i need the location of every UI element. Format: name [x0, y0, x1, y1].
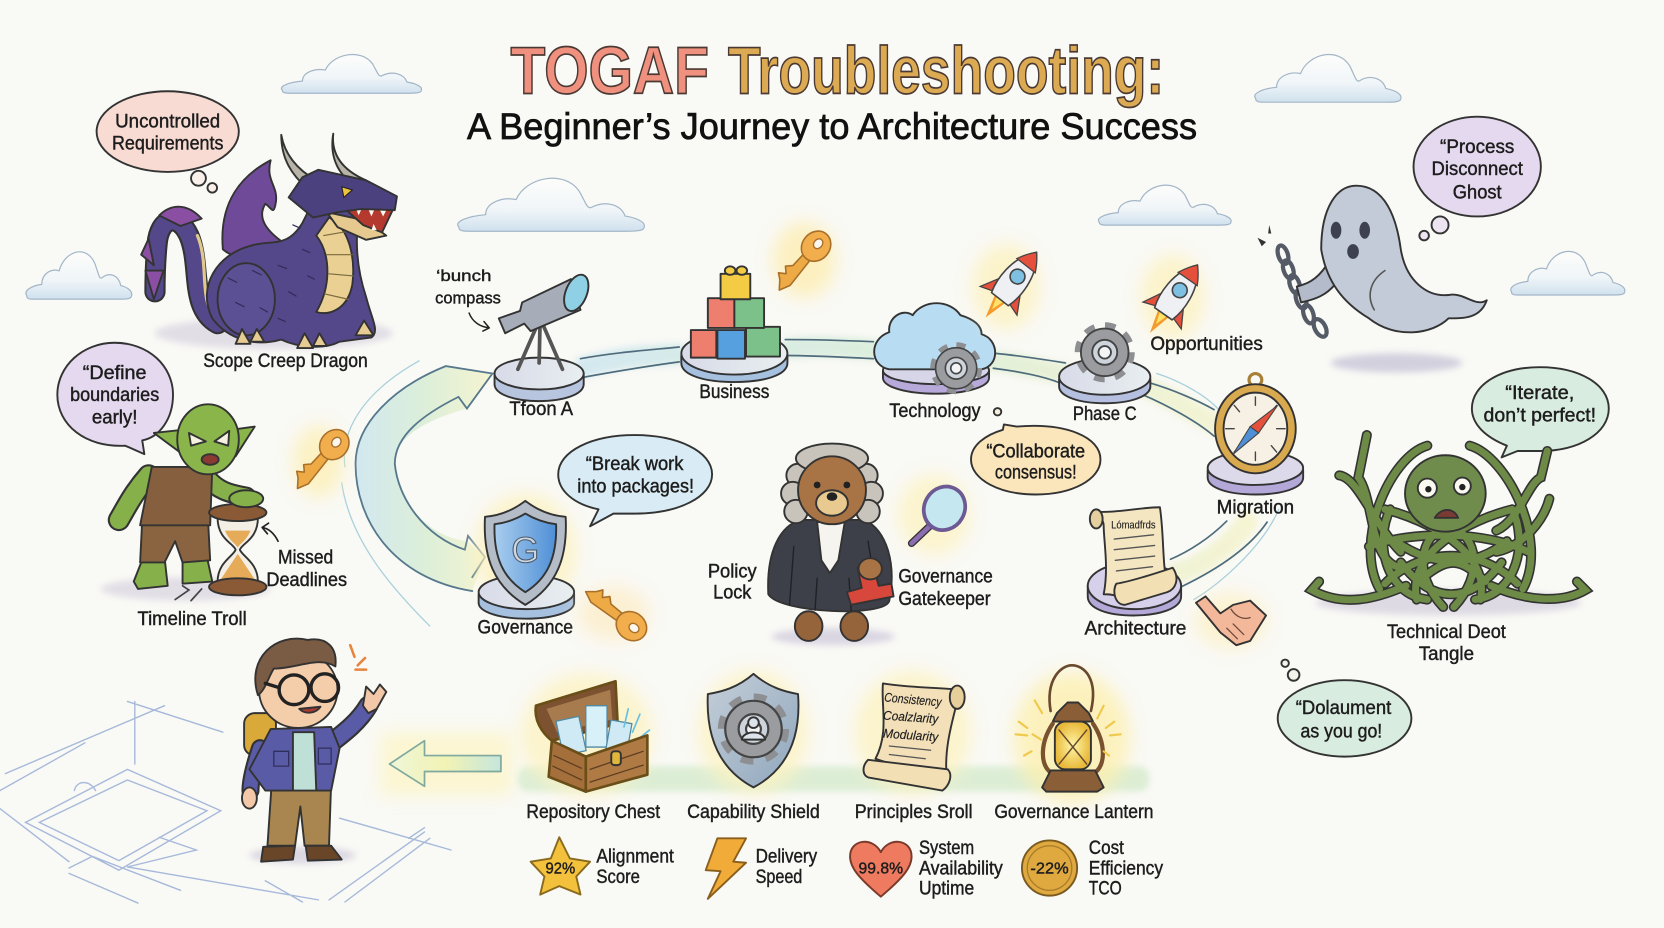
bear head: [798, 456, 866, 524]
compass needle: [1250, 405, 1278, 433]
metric: Delivery Speed: [706, 838, 818, 899]
architect trousers: [267, 783, 331, 846]
speech bubble: Break work: “Break work: [586, 454, 684, 475]
troll left arm: [119, 475, 149, 520]
tangle head: [1405, 455, 1486, 532]
architect smile: [299, 707, 321, 713]
label: Business: Business: [699, 382, 769, 403]
principles glow: [854, 671, 971, 794]
lantern cap: [1053, 702, 1093, 722]
principles text: Consistency: [884, 689, 943, 709]
principles text: Modularity: [883, 726, 939, 744]
icon: coin: [1022, 840, 1077, 896]
speech bubble: Collaborate: [971, 408, 1100, 495]
ghost chain: [1276, 244, 1329, 339]
ghost arm: [1297, 265, 1335, 302]
troll ears: [154, 427, 255, 456]
label: Architecture: Architecture: [1085, 619, 1186, 640]
tangle eyes: [1418, 479, 1437, 498]
label: Governance: Governance: [478, 618, 573, 639]
compass ticks: [1226, 397, 1285, 461]
text: Delivery Speed: [756, 847, 818, 888]
stage: Technology cloud and gear: [874, 303, 995, 394]
thought bubble: Uncontrolled Requirements: [97, 91, 239, 193]
artifact: Capability Shield: [698, 671, 809, 794]
label: Governance Gatekeeper: Governance: [898, 567, 993, 588]
architect lowered arm: [250, 748, 260, 791]
label: Repository Chest: Repository Chest: [526, 802, 661, 823]
thought bubble: Process Disconnect Ghost: Disconnect: [1432, 159, 1523, 180]
chest right face: [586, 735, 647, 792]
technology platform: [883, 371, 989, 394]
metric: Cost Efficiency TCO: [1022, 838, 1163, 900]
scroll lines: [1114, 535, 1155, 571]
phase c gear: [1081, 329, 1129, 376]
chest lid inner: [547, 690, 612, 732]
bear paw: [859, 558, 882, 579]
bear eyes: [814, 482, 821, 488]
phase c platform: [1059, 379, 1150, 403]
label: Governance Lantern: Governance Lantern: [994, 802, 1154, 823]
architect hands: [242, 787, 257, 809]
arrow to hourglass: [262, 523, 278, 541]
business platform: [681, 355, 787, 382]
troll green shins: [134, 557, 212, 589]
text: System Availability Uptime: [919, 838, 1003, 900]
icon: lightning bolt: [706, 838, 746, 899]
bear feet: [795, 611, 822, 641]
title: [467, 33, 1197, 147]
bear robe: [768, 520, 892, 611]
icon: rocket one: [967, 238, 1055, 332]
ribbon rail lines: [581, 340, 1267, 587]
blocks: [691, 266, 780, 359]
dragon tail belly stripe: [197, 236, 218, 318]
lantern frame: [1043, 724, 1103, 773]
shield inner: [494, 514, 556, 592]
stage: Phase C gear: [1059, 329, 1150, 403]
capability gear: [725, 701, 782, 757]
note: compass with arrow: compass: [435, 288, 501, 307]
stage: Business blocks: [681, 266, 787, 382]
troll hand: [229, 490, 263, 507]
title word: TOGAF: TOGAF: [510, 33, 709, 108]
dragon tail: [155, 221, 218, 324]
thought bubble: Process Disconnect Ghost: “Process: [1440, 137, 1514, 158]
dragon wing: [222, 160, 289, 258]
label: Policy Lock: Policy: [708, 561, 757, 582]
label: Missed Deadlines: Missed: [278, 547, 333, 568]
dragon mouth: [342, 206, 393, 232]
capability shield body: [708, 674, 798, 787]
broken debris: [175, 586, 202, 601]
thought bubble: Uncontrolled Requirements: Uncontrolled: [115, 111, 220, 132]
speech bubble: Break work: into packages!: [577, 476, 694, 497]
architect shirt: [293, 732, 316, 791]
chest documents: [556, 706, 632, 755]
icon: star: [531, 837, 590, 895]
blueprint sketch floor: [0, 701, 451, 903]
icon: magnifier: [898, 474, 973, 555]
principles roll top: [950, 686, 965, 709]
lantern glass: [1055, 722, 1091, 769]
stage: Governance shield: [474, 493, 576, 619]
label: Opportunities: Opportunities: [1150, 334, 1263, 355]
dragon eye: [342, 187, 352, 197]
text: Delivery Speed: Speed: [756, 867, 802, 888]
ghost flipper: [1370, 271, 1385, 310]
ribbon soft glow: [584, 347, 1247, 573]
dragon horns: [281, 134, 366, 189]
chest sparkle: [624, 709, 649, 739]
architect jacket: [249, 727, 340, 791]
speech bubble: Iterate: [1472, 367, 1609, 457]
bear wig: [781, 444, 883, 523]
metric: System Availability Uptime: [850, 838, 1003, 900]
icon: heart: [850, 842, 912, 897]
capability person: [748, 717, 759, 728]
shield outer: [485, 501, 566, 605]
thought bubble: Document as you go: [1278, 660, 1411, 757]
scroll title: Lómadfrds: [1111, 519, 1156, 531]
dragon scales: [228, 202, 331, 322]
speech bubble: Collaborate: “Collaborate: [986, 441, 1085, 462]
chest planks: [553, 751, 643, 782]
bear shadow: [772, 628, 895, 645]
compass ring: [1249, 374, 1262, 386]
tangle tentacles outline: [1312, 435, 1585, 607]
lantern glow: [1013, 672, 1130, 803]
bear robe folds: [790, 541, 877, 610]
icon: rocket two: [1131, 252, 1217, 346]
label: Governance Gatekeeper: Gatekeeper: [898, 589, 991, 610]
icon: orange key: [577, 581, 652, 647]
dragon head: [289, 170, 397, 218]
chest glow: [521, 673, 653, 796]
speech bubble: Define boundaries early: [57, 343, 173, 454]
value: 99.8%: 99.8%: [859, 860, 903, 877]
dragon belly ridges: [324, 231, 353, 299]
shield glow: [474, 493, 576, 610]
stage: telescope: [495, 271, 593, 401]
architect shoes: [261, 846, 342, 862]
icon: gold key top: [769, 222, 837, 299]
label: Policy Lock: Lock: [713, 583, 752, 604]
ribbon pale wisps: [342, 361, 1279, 626]
shield G mark: G: [511, 529, 539, 570]
excitement ticks: [350, 645, 366, 670]
label: Technology: Technology: [889, 401, 981, 422]
architecture platform: [1088, 586, 1181, 615]
thought bubble: Document as you go: as you go!: [1301, 722, 1382, 743]
troll right arm: [207, 478, 246, 497]
stage: Migration compass: [1208, 374, 1303, 495]
speech bubble: Define boundaries early: boundaries: [70, 385, 159, 406]
text: Cost Efficiency TCO: Efficiency: [1089, 858, 1163, 879]
principles sheet: [876, 683, 960, 783]
telescope tube: [499, 279, 581, 333]
architect glasses: [265, 674, 339, 705]
arrow: path back to beginner: [380, 732, 513, 796]
lantern base: [1042, 770, 1104, 792]
label: Capability Shield: Capability Shield: [687, 802, 820, 823]
text: System Availability Uptime: Uptime: [919, 879, 974, 900]
troll shadow: [101, 577, 271, 601]
bear stamp: [847, 562, 894, 605]
character: Timeline Troll: [101, 404, 271, 601]
label: Vision A: Tfoon A: [509, 399, 573, 420]
architect shadow: [249, 847, 356, 864]
thought bubble: Uncontrolled Requirements: Requirements: [112, 134, 223, 155]
troll tunic: [140, 467, 212, 525]
dragon haunch: [218, 263, 275, 335]
dragon lower jaw: [327, 212, 386, 240]
clouds: [26, 55, 1625, 299]
speech bubble: Define boundaries early: early!: [92, 407, 137, 428]
technology gear: [936, 348, 977, 389]
speech bubble: Iterate: “Iterate,: [1505, 383, 1574, 404]
note: compass with arrow: [435, 268, 501, 331]
text: Cost Efficiency TCO: Cost: [1089, 838, 1124, 859]
subtitle: A Beginner’s Journey to Architecture Success: [467, 105, 1197, 147]
text: Delivery Speed: Delivery: [756, 847, 818, 868]
chest left face: [549, 741, 586, 792]
dragon teeth: [356, 208, 386, 230]
label: Technical Deot Tangle: Technical Deot: [1387, 622, 1506, 643]
character: Governance Gatekeeper bear judge: [768, 444, 895, 645]
thought bubble: Document as you go: “Dolaument: [1296, 698, 1392, 719]
hourglass: [209, 504, 266, 595]
chest lid: [536, 681, 618, 741]
chest lock: [611, 751, 621, 765]
journey loop ribbon: [342, 340, 1279, 626]
dragon shadow: [155, 317, 393, 349]
troll head: [177, 404, 239, 474]
label: Migration: Migration: [1217, 498, 1294, 519]
label: Missed Deadlines: Deadlines: [266, 570, 347, 591]
dragon tail fins: [141, 207, 202, 299]
text: Alignment Score: Alignment: [596, 847, 675, 868]
bear muzzle: [816, 490, 848, 516]
architecture scroll roll: [1114, 568, 1176, 605]
dragon body: [207, 202, 375, 347]
architect backpack tape: [244, 713, 276, 756]
icon: gold key left: [287, 424, 355, 498]
value: -22%: -22%: [1030, 860, 1069, 877]
architect hair: [255, 639, 336, 695]
principles roll bottom: [864, 760, 950, 791]
artifact: Governance Lantern: [1013, 665, 1130, 803]
text: System Availability Uptime: System: [919, 838, 974, 859]
label: Technical Deot Tangle: Tangle: [1419, 644, 1474, 665]
architecture scroll sheet: [1093, 507, 1167, 600]
artifact: Principles Scroll: [854, 671, 971, 794]
text: Cost Efficiency TCO: TCO: [1089, 879, 1122, 900]
label: Policy Lock: [708, 561, 757, 604]
tangle mouth: [1435, 510, 1458, 518]
technology cloud: [874, 303, 995, 369]
speech bubble: Break work: [558, 435, 712, 526]
tangle tentacles fill: [1312, 435, 1585, 607]
metric: Alignment Score: [531, 837, 675, 895]
architect pockets: [274, 748, 331, 766]
label: Missed Deadlines: [266, 547, 347, 591]
character: Scope Creep Dragon: [141, 134, 397, 349]
text: Alignment Score: [596, 847, 675, 888]
principles text: [883, 689, 943, 744]
compass case: [1215, 384, 1296, 473]
troll eyes: [189, 431, 229, 446]
ghost shadow: [1331, 353, 1462, 372]
lantern handle: [1050, 665, 1093, 711]
text: Cost Efficiency TCO: [1089, 838, 1163, 900]
artifact: Repository Chest: [521, 673, 653, 796]
text: Alignment Score: Score: [596, 867, 640, 888]
thought bubble: Process Disconnect Ghost: [1414, 117, 1541, 240]
value: 92%: 92%: [545, 860, 575, 877]
label: Governance Gatekeeper: [898, 567, 993, 610]
telescope platform: [495, 374, 584, 401]
principles text: Coalzlarity: [883, 708, 939, 726]
title word: Troubleshooting: Troubleshooting:: [728, 33, 1164, 108]
character: Process Disconnect Ghost: [1258, 186, 1487, 372]
dragon belly: [316, 218, 353, 313]
ghost body: [1321, 186, 1487, 332]
thought bubble: Process Disconnect Ghost: Ghost: [1453, 182, 1502, 203]
ghost eyes: [1331, 222, 1341, 239]
tripod: [518, 318, 562, 369]
left return arc outline: [356, 366, 492, 591]
architect raised arm: [331, 706, 368, 743]
capability glow: [698, 671, 809, 794]
note: compass with arrow: ‘bunch: [436, 268, 491, 285]
label: Phase C: Phase C: [1073, 404, 1137, 425]
speech bubble: Define boundaries early: “Define: [83, 363, 146, 384]
chain sparks: [1258, 225, 1271, 246]
label: Scope Creep Dragon: Scope Creep Dragon: [203, 351, 368, 372]
ground band under artifacts: [518, 766, 1149, 792]
character: beginner architect: [242, 639, 386, 864]
compass platform: [1208, 470, 1303, 495]
speech bubble: Iterate: don’t perfect!: [1484, 405, 1596, 426]
lantern rays: [1016, 700, 1121, 756]
stage: Architecture scroll: [1088, 507, 1181, 615]
troll mouth: [202, 454, 219, 465]
label: Principles Scroll: Principles Sroll: [855, 802, 973, 823]
troll brown trousers: [140, 520, 210, 562]
governance platform: [479, 594, 574, 619]
icon: handshake: [1195, 593, 1267, 648]
character: Technical Debt Tangle: [1312, 435, 1585, 615]
tangle shadow: [1316, 590, 1581, 615]
label: Technical Deot Tangle: [1387, 622, 1506, 665]
bear jabot: [817, 522, 845, 573]
left return arc band: [356, 366, 492, 591]
text: System Availability Uptime: Availability: [919, 858, 1003, 879]
label: Timeline Troll: Timeline Troll: [137, 609, 247, 630]
speech bubble: Collaborate: consensus!: [995, 463, 1077, 484]
principles lines: [889, 746, 931, 759]
dragon claws: [236, 320, 374, 348]
architect head: [259, 652, 337, 728]
